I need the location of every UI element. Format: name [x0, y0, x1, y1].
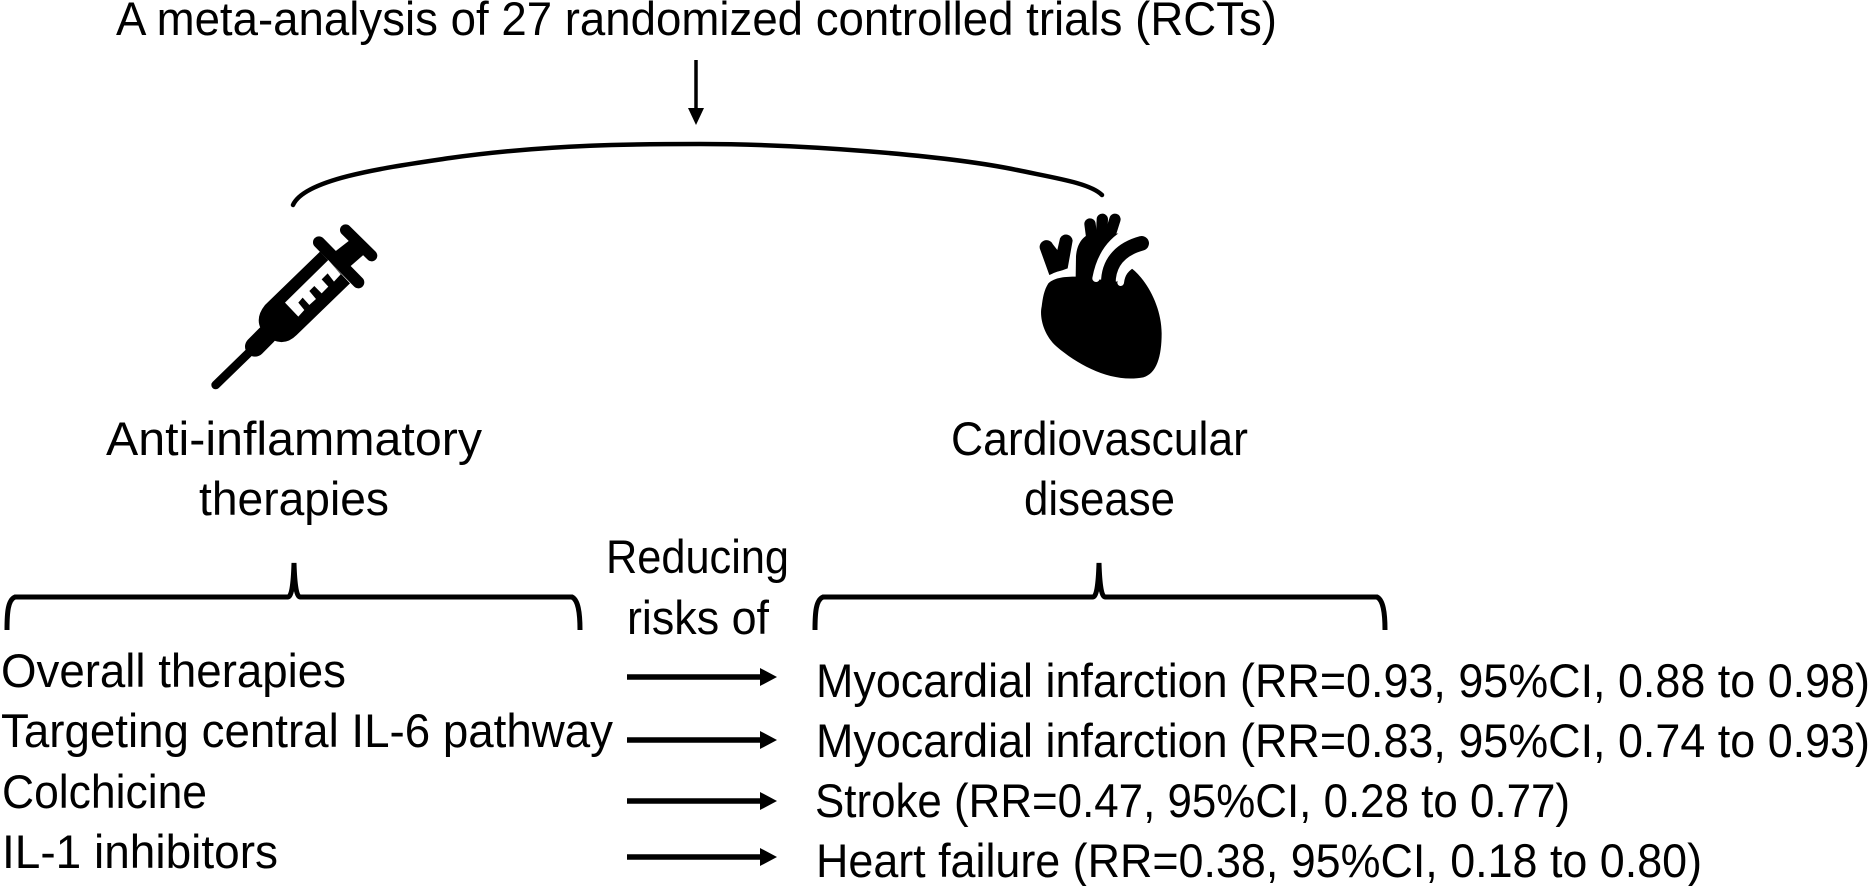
label: reducing risks of: risks of — [627, 591, 770, 644]
brace: therapies — [7, 563, 580, 630]
label: cardiovascular disease: Cardiovascular — [951, 412, 1248, 465]
label: reducing risks of — [606, 530, 789, 644]
label: anti-inflammatory therapies — [106, 412, 483, 525]
arrow: row 4 — [627, 848, 777, 866]
label: cardiovascular disease: disease — [1024, 472, 1175, 525]
arrow: row 2 — [627, 731, 777, 749]
arrow: title to arc — [688, 60, 704, 125]
outcome list: Heart failure (RR=0.38, 95%CI, 0.18 to 0.80) — [816, 834, 1702, 886]
label: anti-inflammatory therapies: therapies — [199, 472, 389, 525]
label: anti-inflammatory therapies: Anti-inflammatory — [106, 412, 483, 465]
therapy list: Colchicine — [2, 765, 207, 818]
therapy list: IL-1 inhibitors — [2, 825, 278, 878]
icon: syringe — [216, 230, 372, 385]
label: cardiovascular disease — [951, 412, 1248, 525]
label: reducing risks of: Reducing — [606, 530, 789, 583]
therapy list — [1, 644, 613, 878]
outcome list — [815, 654, 1870, 886]
outcome list: Stroke (RR=0.47, 95%CI, 0.28 to 0.77) — [815, 774, 1570, 827]
therapy list: Overall therapies — [1, 644, 346, 697]
icon: heart — [1040, 219, 1162, 379]
therapy list: Targeting central IL-6 pathway — [1, 704, 613, 757]
arrow: row 3 — [627, 792, 777, 810]
arrow: row 1 — [627, 668, 777, 686]
arc linking therapies and disease — [293, 144, 1102, 205]
brace: disease — [815, 563, 1385, 630]
